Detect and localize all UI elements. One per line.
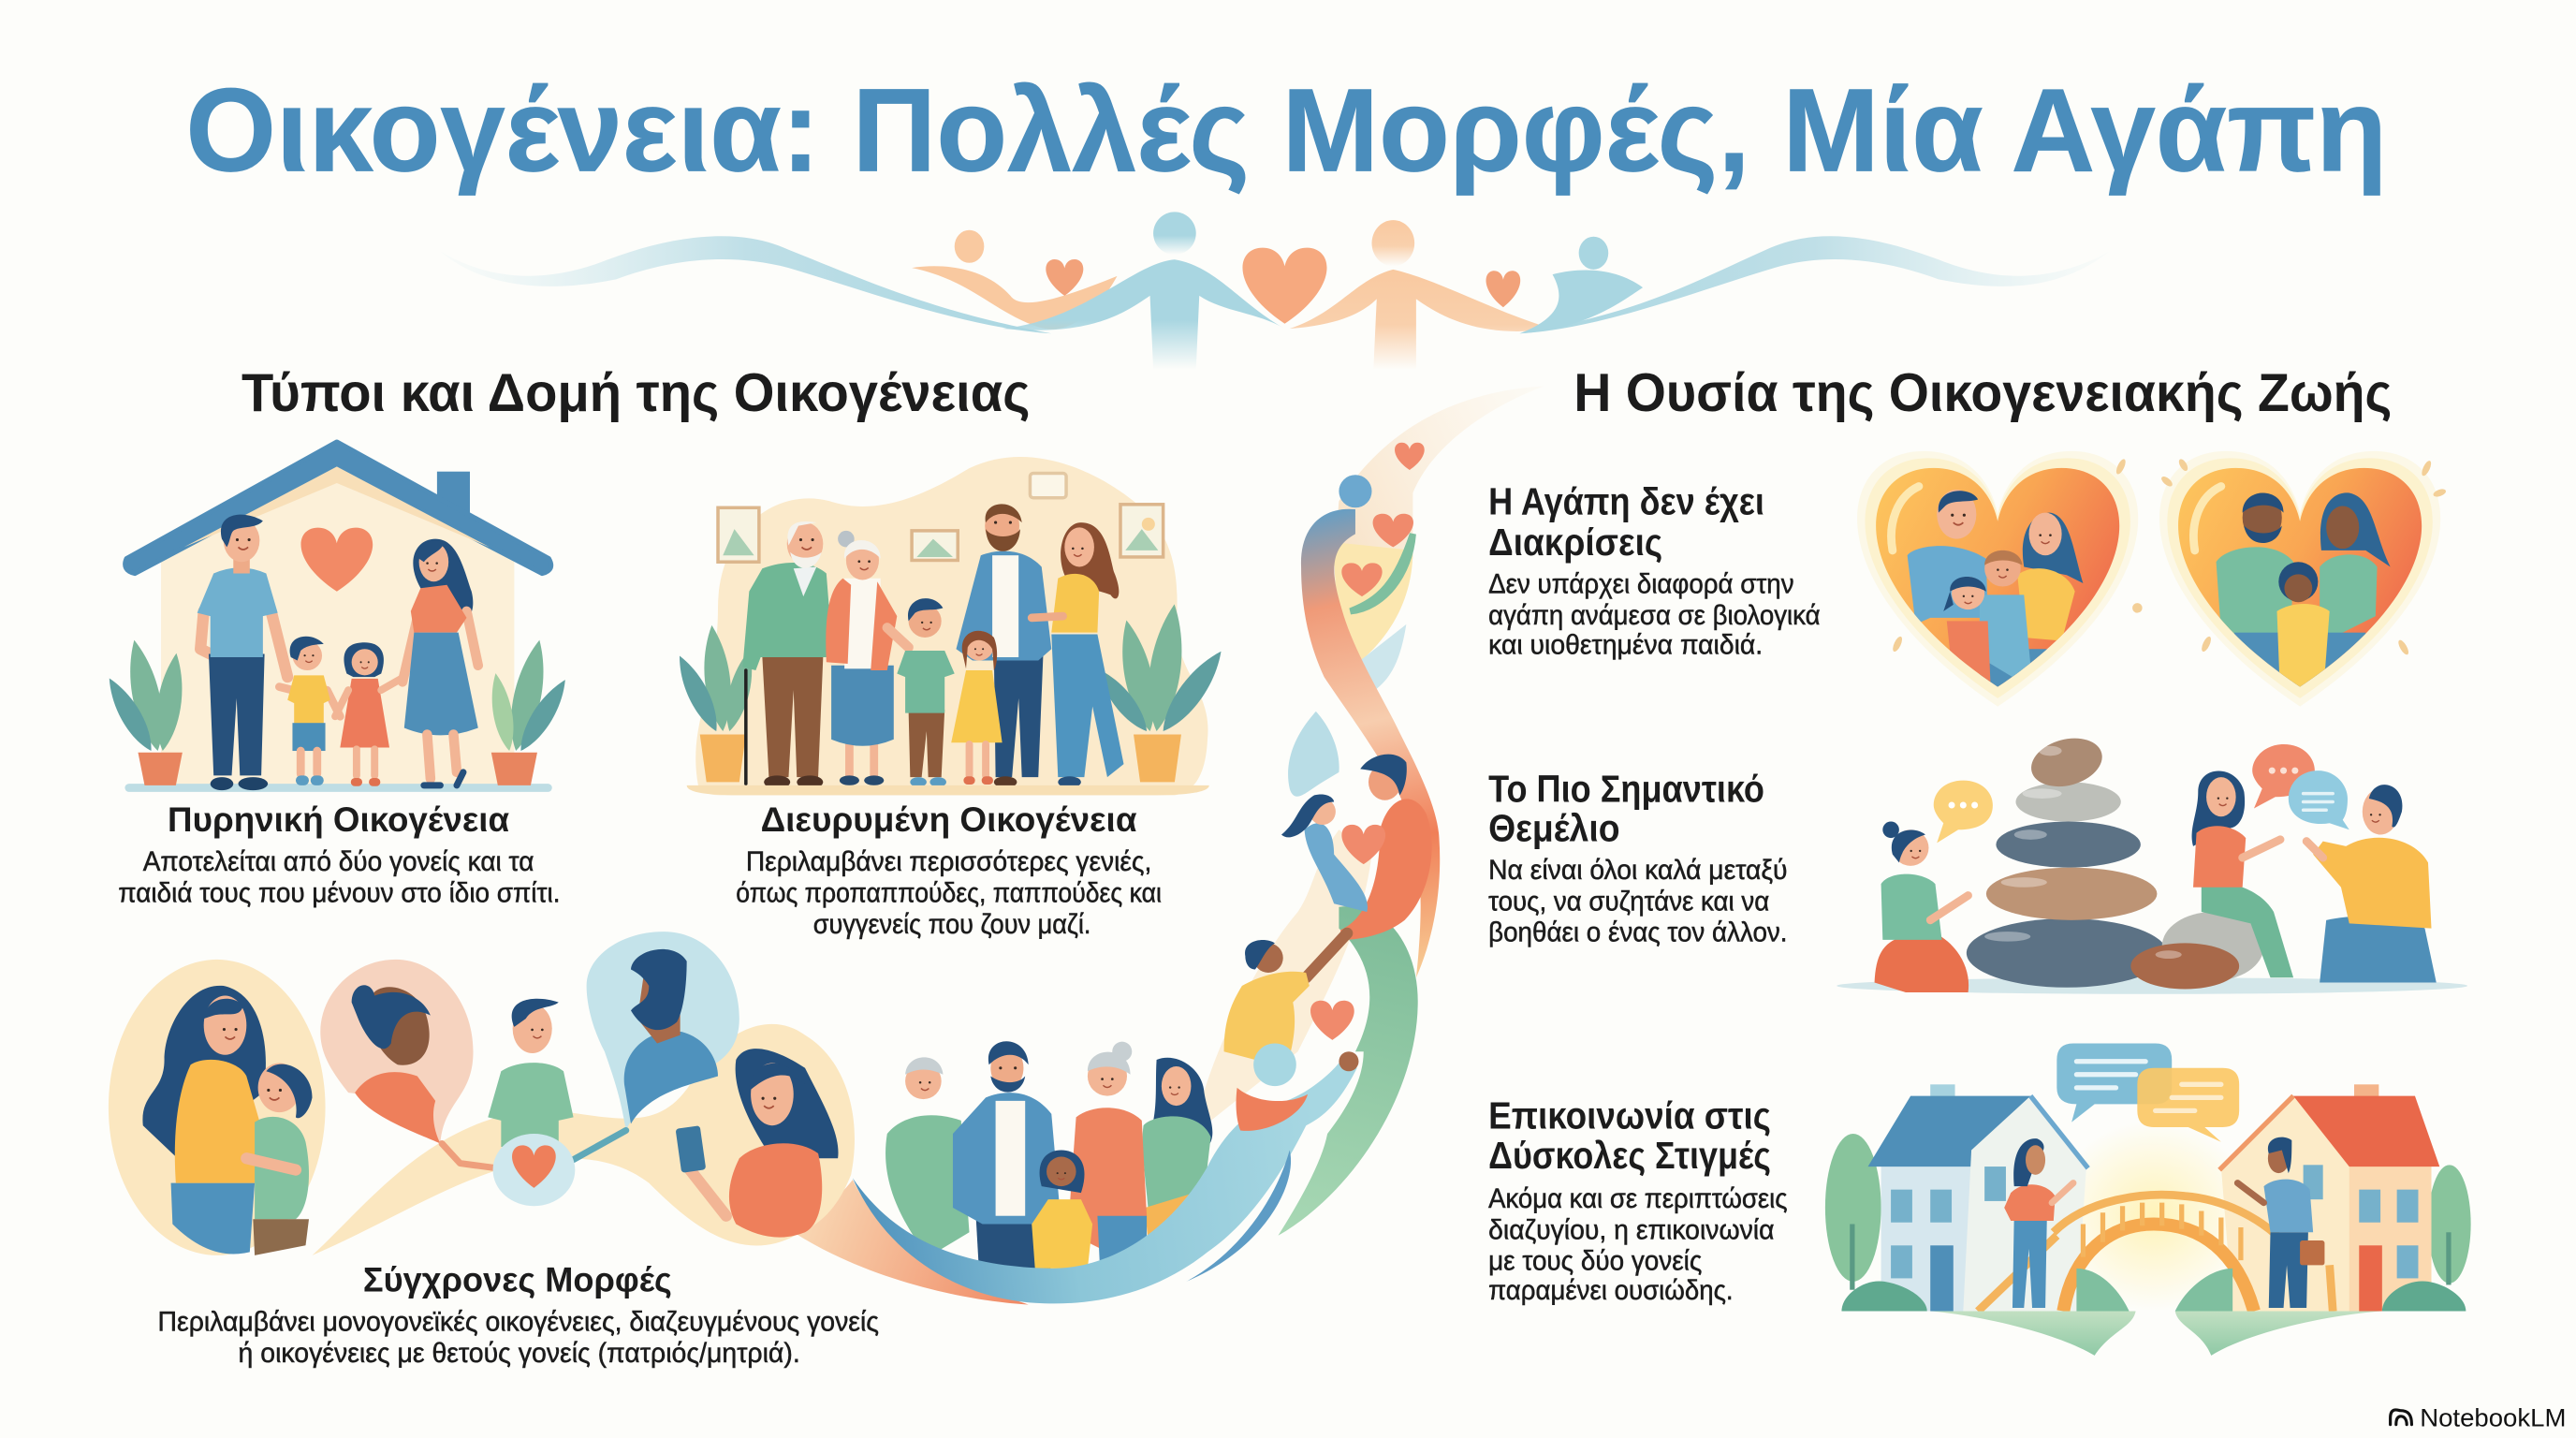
description: συγγενείς που ζουν μαζί. <box>813 909 1090 940</box>
heart lower <box>1310 1001 1354 1040</box>
description <box>736 846 1162 940</box>
plant right <box>1090 602 1231 782</box>
chimney <box>437 472 470 521</box>
light blue drop behind couple <box>1288 712 1339 797</box>
woman with phone <box>676 1049 839 1238</box>
blue band sweep with figure <box>853 1056 1357 1303</box>
title: Οικογένεια: Πολλές Μορφές, Μία Αγάπη <box>185 65 2387 197</box>
section heading left: Τύποι και Δομή της Οικογένειας <box>242 363 1030 423</box>
floor shadow <box>1837 977 2467 994</box>
grandma left <box>886 1115 970 1257</box>
heading: Η Αγάπη δεν έχει <box>1488 479 1764 522</box>
heading: Διακρίσεις <box>1488 521 1662 564</box>
blue speech bubble <box>2289 770 2349 829</box>
small left heart <box>1046 259 1083 296</box>
blue speech bubble <box>2056 1043 2172 1123</box>
blue head top figure <box>1339 475 1372 507</box>
kneeling woman <box>1875 822 1969 992</box>
illustration: two houses and a bridge <box>1825 1043 2471 1356</box>
panel: love has no discrimination <box>1488 451 2447 707</box>
heading: Πυρηνική Οικογένεια <box>168 800 509 839</box>
woman <box>1305 823 1368 912</box>
father <box>198 515 287 790</box>
orange band <box>794 1180 1029 1304</box>
description <box>1488 855 1788 948</box>
yellow speech bubble <box>1934 781 1993 843</box>
description: τους, να συζητάνε και να <box>1488 886 1769 917</box>
description: με τους δύο γονείς <box>1488 1246 1702 1277</box>
cream band middle <box>1194 829 1372 1134</box>
ground <box>1841 1312 2465 1356</box>
plant left <box>670 624 759 782</box>
heart connector <box>442 1130 626 1206</box>
description: Αποτελείται από δύο γονείς και τα <box>143 846 534 877</box>
left tree <box>1825 1134 1881 1290</box>
description <box>158 1307 879 1369</box>
sparkle marks <box>1891 458 2447 656</box>
glow <box>2159 451 2440 707</box>
floor <box>687 785 1209 795</box>
central orange figure <box>1290 220 1553 370</box>
panel: extended family <box>670 457 1231 940</box>
description: Περιλαμβάνει περισσότερες γενιές, <box>746 846 1151 877</box>
dad <box>976 1216 1051 1273</box>
yellow patch under blue head <box>1334 542 1412 666</box>
small right heart <box>1486 271 1520 307</box>
man on bridge <box>2237 1137 2324 1308</box>
right tree <box>2428 1165 2471 1284</box>
heading <box>1488 479 1764 564</box>
heading: Δύσκολες Στιγμές <box>1488 1134 1771 1177</box>
section heading right: Η Ουσία της Οικογενειακής Ζωής <box>1573 363 2392 423</box>
description: ή οικογένειες με θετούς γονείς (πατριός/μητριά). <box>239 1338 800 1369</box>
heading: Το Πιο Σημαντικό <box>1488 767 1764 810</box>
description: Περιλαμβάνει μονογονεϊκές οικογένειες, διαζευγμένους γονείς <box>158 1307 879 1338</box>
heart <box>300 528 373 592</box>
glow <box>1857 451 2138 707</box>
heart with family two <box>2159 451 2440 707</box>
plant right <box>487 638 574 785</box>
panel: modern family forms <box>142 932 879 1369</box>
description <box>1488 1183 1788 1306</box>
blue house <box>1868 1084 2088 1312</box>
cream ribbon tail <box>1334 386 1544 559</box>
dad <box>956 504 1051 788</box>
bridge <box>1978 1195 2333 1312</box>
green S ribbon <box>1278 906 1418 1236</box>
heart <box>1341 825 1385 864</box>
background blob <box>695 457 1208 795</box>
description: αγάπη ανάμεσα σε βιολογικά <box>1488 600 1821 631</box>
panel: most important foundation <box>1488 731 2467 994</box>
illustration: house with family <box>101 442 574 792</box>
grandma <box>826 531 909 785</box>
yellow wave <box>313 1024 855 1255</box>
logo text: NotebookLM <box>2420 1402 2566 1431</box>
description: Δεν υπάρχει διαφορά στην <box>1488 569 1794 600</box>
woman on bridge <box>2004 1138 2073 1308</box>
description: παραμένει ουσιώδης. <box>1488 1275 1734 1306</box>
logo icon <box>2391 1410 2411 1425</box>
description: παιδιά τους που μένουν στο ίδιο σπίτι. <box>118 878 561 909</box>
bubble: father portrait <box>587 932 739 1130</box>
panel: nuclear family <box>101 442 574 909</box>
family <box>2217 492 2391 698</box>
red house <box>2219 1084 2439 1312</box>
blue figure head <box>1253 1043 1296 1086</box>
heading: Διευρυμένη Οικογένεια <box>761 800 1137 839</box>
description: όπως προπαππούδες, παππούδες και <box>736 878 1162 909</box>
boy <box>279 637 340 781</box>
description: βοηθάει ο ένας τον άλλον. <box>1488 917 1788 948</box>
illustration: stone stack and talking people <box>1837 731 2467 994</box>
woman right <box>1150 1058 1212 1147</box>
heading: Σύγχρονες Μορφές <box>363 1260 672 1299</box>
bushes <box>1841 1269 2466 1312</box>
orange speech bubble <box>2252 744 2315 808</box>
heading <box>1488 1094 1771 1177</box>
orange S ribbon <box>1301 509 1440 977</box>
house wall <box>161 473 514 788</box>
central heart <box>1242 248 1327 324</box>
girl <box>1032 1199 1092 1269</box>
yellow oval backdrop <box>109 960 326 1255</box>
sitting woman <box>2192 771 2293 977</box>
heading <box>1488 767 1764 850</box>
mum <box>1032 522 1123 788</box>
darker blue slash <box>1186 1151 1291 1282</box>
glow behind bridge <box>2052 1121 2256 1312</box>
boy in middle <box>488 999 574 1147</box>
family <box>1908 490 2083 698</box>
floor <box>124 784 552 792</box>
boy reaching <box>1224 933 1347 1068</box>
small right figure <box>1519 237 1643 333</box>
boy <box>897 598 955 787</box>
mother <box>402 539 478 785</box>
hand <box>1339 1051 1358 1071</box>
girl <box>951 631 1003 781</box>
heading: Θεμέλιο <box>1488 807 1620 850</box>
roof <box>125 442 551 574</box>
orange scarf <box>1237 1088 1308 1131</box>
description: Να είναι όλοι καλά μεταξύ <box>1488 855 1788 886</box>
illustration: multigenerational family <box>670 457 1231 795</box>
small left figure <box>912 230 1117 330</box>
bubble: mother portrait <box>320 960 474 1143</box>
green leaf shape <box>1351 534 1412 611</box>
left wave <box>440 236 1051 333</box>
hearts top <box>1341 443 1425 596</box>
NotebookLM logo <box>2391 1402 2566 1431</box>
kneeling man <box>2306 785 2437 983</box>
decorative family wave under title <box>440 212 2110 370</box>
grandma right <box>1068 1108 1147 1249</box>
description <box>1488 569 1821 661</box>
plant left <box>101 638 188 785</box>
group of five <box>886 1041 1212 1284</box>
description <box>118 846 561 909</box>
panel: communication in hard moments <box>1488 1043 2471 1356</box>
yellow speech bubble <box>2137 1068 2239 1142</box>
girl <box>335 642 404 782</box>
picture frames <box>718 473 1164 562</box>
panel: central ribbon of family figures <box>109 386 1544 1304</box>
hugging boy <box>246 1064 313 1255</box>
stones <box>1967 731 2263 990</box>
right wave <box>1519 236 2110 333</box>
light-blue strip <box>1360 624 1406 694</box>
couple holding hands <box>1281 755 1432 940</box>
mother hugging <box>142 986 271 1255</box>
grandpa <box>742 521 833 788</box>
description: διαζυγίου, η επικοινωνία <box>1488 1214 1774 1245</box>
description: και υιοθετημένα παιδιά. <box>1488 630 1763 661</box>
central blue figure <box>1003 212 1284 370</box>
heading: Επικοινωνία στις <box>1488 1094 1771 1137</box>
heart with family one <box>1857 451 2138 707</box>
illustration: modern families <box>142 932 839 1255</box>
description: Ακόμα και σε περιπτώσεις <box>1488 1183 1788 1214</box>
man <box>1340 799 1432 940</box>
